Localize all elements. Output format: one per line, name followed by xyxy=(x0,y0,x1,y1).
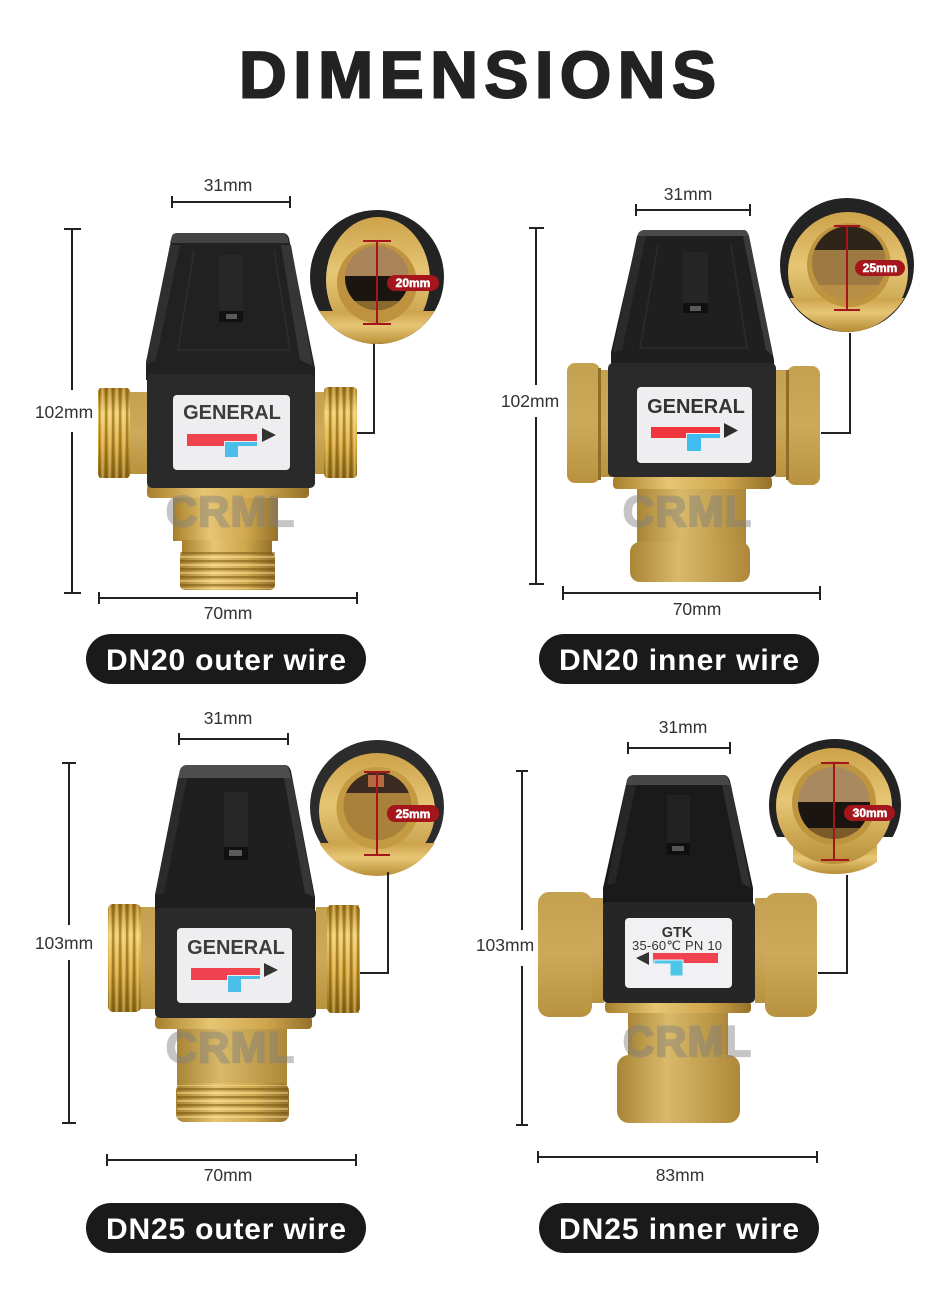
connector line xyxy=(360,872,388,973)
valve photo: DN25 inner xyxy=(538,775,817,1123)
panel: DN20 outer wire xyxy=(35,175,444,684)
connector line xyxy=(818,875,847,973)
dimension: 102mm height: 102mm xyxy=(35,402,93,422)
dimension: 70mm length xyxy=(99,592,357,623)
product label: GENERAL: GENERAL xyxy=(183,402,281,424)
dimension: 103mm height xyxy=(35,763,93,1123)
detail circle: 30mm bore xyxy=(769,739,901,874)
dimension: 70mm length: 70mm xyxy=(204,1165,252,1185)
dimension: 70mm length: 70mm xyxy=(673,599,721,619)
dimension: 102mm height xyxy=(501,228,559,584)
dimension: 31mm width xyxy=(172,175,290,208)
dimension: 70mm length: 70mm xyxy=(204,603,252,623)
panel: DN20 inner wire xyxy=(501,184,914,684)
dimension: 31mm width xyxy=(179,708,288,745)
product label: GTK xyxy=(625,918,732,988)
dimension: 83mm length: 83mm xyxy=(656,1165,704,1185)
pill label xyxy=(86,1203,366,1253)
product label: GENERAL: GENERAL xyxy=(187,937,285,959)
title: DIMENSIONS xyxy=(239,38,716,112)
panel: DN25 inner wire xyxy=(476,717,901,1253)
pill label: DN25 outer wire xyxy=(106,1213,346,1246)
pill label: DN25 inner wire xyxy=(559,1213,799,1246)
watermark: CRML xyxy=(166,1024,294,1072)
dimension: 102mm height xyxy=(35,229,93,593)
valve photo: DN25 outer xyxy=(108,765,360,1122)
watermark: CRML xyxy=(623,1018,751,1066)
dimension: 31mm width: 31mm xyxy=(204,175,252,195)
panel: DN25 outer wire xyxy=(35,708,444,1253)
dimension: 103mm height: 103mm xyxy=(35,933,93,953)
product label: GENERAL xyxy=(637,387,752,463)
pill label xyxy=(539,1203,819,1253)
dimension: 31mm width: 31mm xyxy=(204,708,252,728)
dimension: 31mm width xyxy=(636,184,750,216)
detail circle: 30mm bore: 30mm xyxy=(853,806,887,820)
detail circle: 20mm bore xyxy=(310,210,444,344)
dimension: 70mm length xyxy=(107,1154,356,1185)
pill label xyxy=(539,634,819,684)
detail circle: 25mm bore: 25mm xyxy=(396,807,430,821)
pill label: DN20 outer wire xyxy=(106,644,346,677)
detail circle: 25mm bore xyxy=(780,198,914,332)
product label: GENERAL xyxy=(177,928,292,1003)
product label: GTK: 35-60℃ PN 10 xyxy=(632,938,722,953)
pill label: DN20 inner wire xyxy=(559,644,799,677)
connector line xyxy=(821,333,850,433)
dimension: 31mm width: 31mm xyxy=(664,184,712,204)
dimension: 103mm height xyxy=(476,771,534,1125)
detail circle: 25mm bore: 25mm xyxy=(863,261,897,275)
dimension: 31mm width: 31mm xyxy=(659,717,707,737)
watermark: CRML xyxy=(623,488,751,536)
product label: GENERAL: GENERAL xyxy=(647,396,745,418)
dimension: 83mm length xyxy=(538,1151,817,1185)
pill label xyxy=(86,634,366,684)
valve photo: DN20 inner xyxy=(567,230,820,582)
watermark: CRML xyxy=(166,488,294,536)
connector line xyxy=(357,344,374,433)
product label: GENERAL xyxy=(173,395,290,470)
dimension: 103mm height: 103mm xyxy=(476,935,534,955)
detail circle: 25mm bore xyxy=(310,740,444,876)
dimension: 31mm width xyxy=(628,717,730,754)
product label: GTK: GTK xyxy=(662,925,693,941)
valve photo: DN20 outer xyxy=(98,233,357,590)
detail circle: 20mm bore: 20mm xyxy=(396,276,430,290)
dimension: 102mm height: 102mm xyxy=(501,391,559,411)
dimension: 70mm length xyxy=(563,586,820,619)
